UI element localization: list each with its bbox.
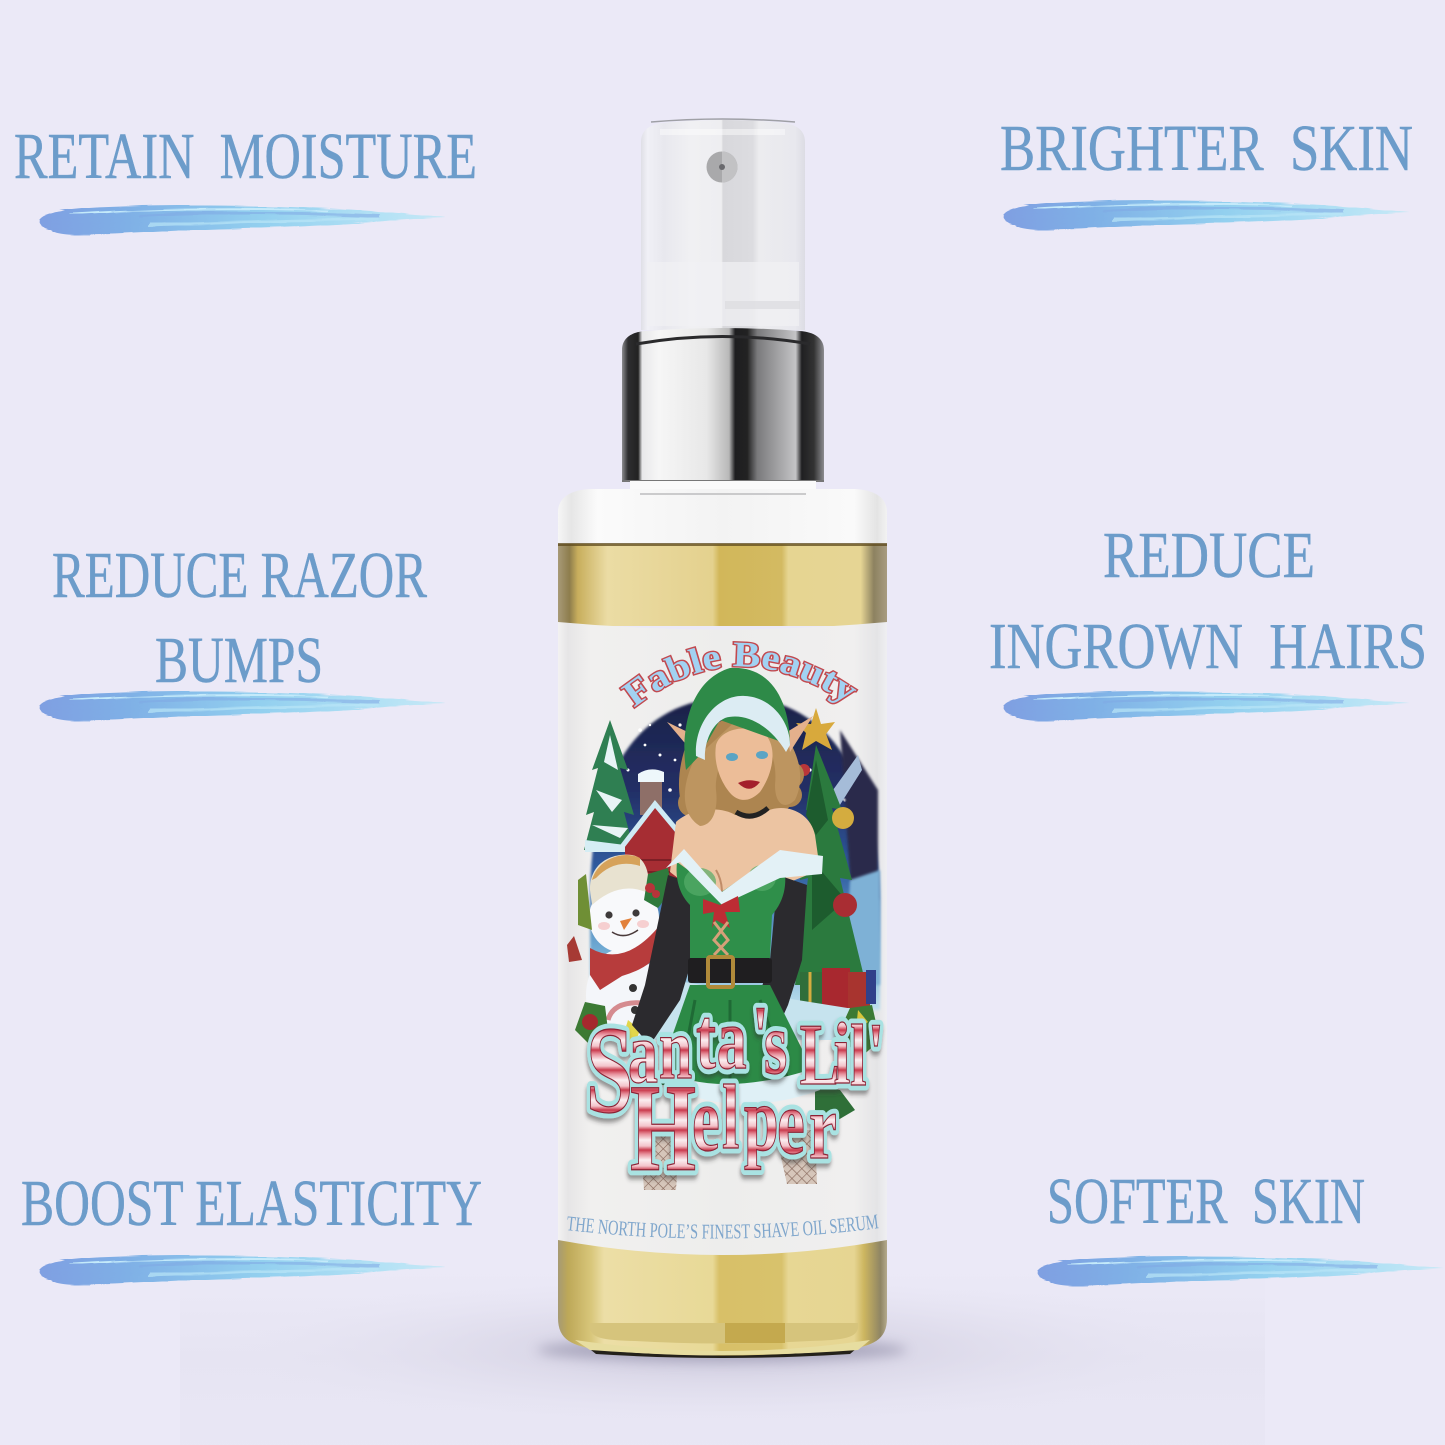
snow stars <box>626 723 861 802</box>
benefit: reduce ingrown hairs <box>989 519 1427 721</box>
fur trim on dress <box>666 849 823 905</box>
left pine tree <box>584 720 634 850</box>
product name: Santa's Lil' Helper <box>586 989 884 1198</box>
spray nozzle <box>706 152 738 182</box>
teal outline layer: Helper <box>630 1060 837 1198</box>
benefit: retain moisture <box>14 120 477 235</box>
tree star <box>796 708 835 750</box>
benefit: retain moisture: RETAIN MOISTURE <box>14 120 477 193</box>
snowman <box>586 855 662 1041</box>
gloved arm left <box>632 875 691 1040</box>
holly left of snowman <box>578 868 672 930</box>
elf face <box>715 728 773 800</box>
benefit: reduce razor bumps: REDUCE RAZOR <box>52 539 427 612</box>
corset lace <box>714 922 728 955</box>
holly right <box>846 1005 876 1052</box>
hem holly <box>815 1089 855 1120</box>
benefit: brighter skin <box>1000 112 1413 230</box>
elf hair back <box>678 720 804 816</box>
tagline <box>568 1214 879 1238</box>
benefit: reduce razor bumps <box>39 539 445 721</box>
brush stroke <box>39 691 445 721</box>
benefit: reduce ingrown hairs: REDUCE <box>1103 519 1315 592</box>
night sky <box>590 697 880 1010</box>
silver collar <box>622 328 824 481</box>
cleavage shading <box>716 870 722 893</box>
tagline: THE NORTH POLE’S FINEST SHAVE OIL SERUM <box>568 1214 879 1238</box>
product label <box>558 622 887 1255</box>
benefit: softer skin <box>1037 1165 1443 1286</box>
brush stroke <box>1037 1256 1443 1286</box>
red bow <box>703 896 740 928</box>
house <box>585 769 680 886</box>
elf hair front <box>685 724 800 826</box>
brush stroke <box>1003 200 1409 230</box>
elf legs <box>640 1130 817 1190</box>
right christmas tree <box>795 745 866 985</box>
candy cane <box>608 1003 652 1020</box>
brush stroke <box>1003 691 1409 721</box>
bottle shoulder <box>558 489 887 545</box>
oil upper band <box>558 543 887 626</box>
candy lettering: Santa's Lil' <box>586 989 884 1140</box>
elf ears <box>667 716 813 755</box>
presents <box>800 968 876 1008</box>
skirt fur trim <box>694 1072 820 1104</box>
elf eyes <box>726 751 768 761</box>
green dress <box>661 862 802 1085</box>
brand name: Fable Beauty: Fable Beauty <box>618 641 858 710</box>
elf lips <box>738 780 760 789</box>
benefit: reduce razor bumps: BUMPS <box>155 624 323 697</box>
cardinal bird <box>567 936 582 962</box>
oil lower band <box>558 1235 887 1358</box>
belt and buckle <box>688 957 772 987</box>
product bottle <box>558 118 887 1358</box>
snow ground <box>638 982 849 1040</box>
label illustration <box>567 668 880 1190</box>
candy lettering: Helper <box>630 1060 837 1198</box>
brush stroke <box>39 205 445 235</box>
floor panel with bottle shadow <box>180 1270 1265 1445</box>
elf hat <box>684 668 790 770</box>
bottle neck <box>630 481 816 491</box>
choker <box>736 808 768 816</box>
spray cap <box>641 119 805 330</box>
brush stroke <box>39 1255 445 1285</box>
right building <box>840 730 878 900</box>
teal outline layer: Santa's Lil' <box>586 989 884 1140</box>
gloved arm right <box>762 878 807 1014</box>
benefit: boost elasticity: BOOST ELASTICITY <box>21 1167 482 1240</box>
elf shoulders and chest <box>670 808 818 891</box>
holly bottom left <box>575 1002 639 1043</box>
benefit: boost elasticity <box>21 1167 482 1285</box>
